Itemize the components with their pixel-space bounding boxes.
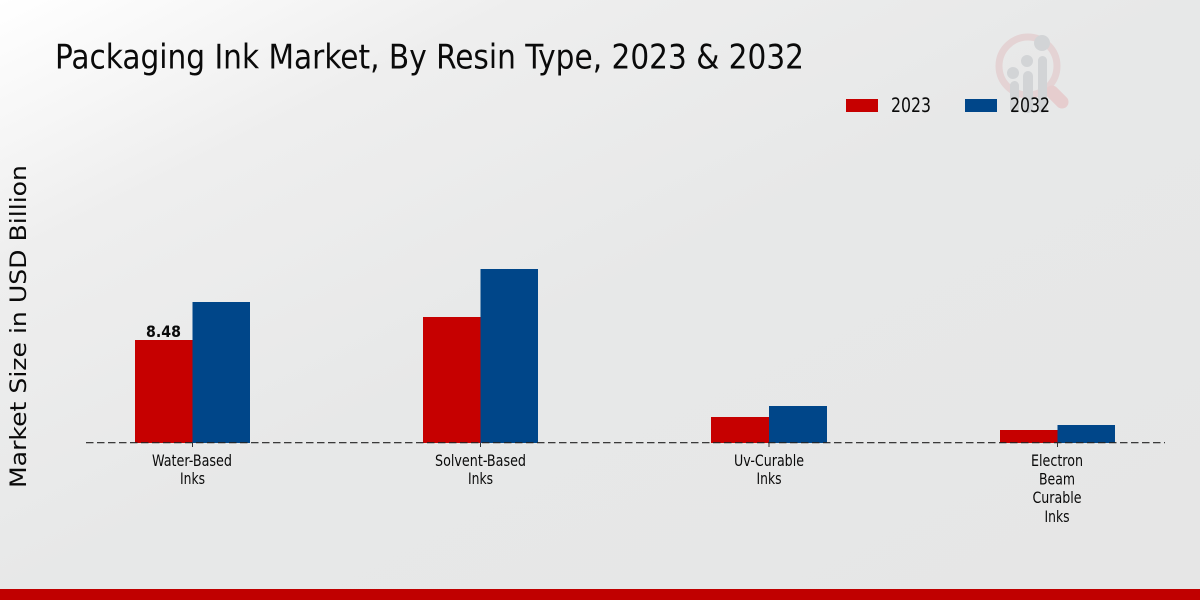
label: Electron Beam Curable Inks (1031, 451, 1083, 526)
bar chart (86, 269, 1165, 447)
group: Water-Based Inks (135, 302, 250, 443)
label: Water-Based Inks: Inks (180, 469, 205, 488)
watermark logo (999, 35, 1062, 113)
group: Electron Beam Curable Inks (1000, 425, 1115, 443)
footer bar (0, 589, 1200, 600)
label: Solvent-Based Inks: Inks (468, 469, 493, 488)
label: Water-Based Inks: Water-Based (152, 451, 232, 470)
legend: 2023: 2023 (891, 94, 931, 117)
group: Solvent-Based Inks (423, 269, 538, 443)
y axis label: Market Size in USD Billion (6, 165, 32, 488)
label: Electron Beam Curable Inks: Inks (1044, 507, 1070, 526)
legend: 2023 (846, 94, 931, 117)
label: Uv-Curable Inks: Inks (756, 469, 782, 488)
label: Water-Based Inks (152, 451, 232, 488)
label: Electron Beam Curable Inks: Electron (1031, 451, 1083, 470)
legend (846, 94, 1050, 117)
label: Solvent-Based Inks (435, 451, 526, 488)
label: Electron Beam Curable Inks: Beam (1039, 470, 1075, 488)
label: Uv-Curable Inks: Uv-Curable (734, 451, 804, 470)
label: Electron Beam Curable Inks: Curable (1032, 488, 1082, 507)
label: Uv-Curable Inks (734, 451, 804, 488)
group: Uv-Curable Inks (711, 406, 827, 443)
title: Packaging Ink Market, By Resin Type, 2023 & 2032 (55, 38, 804, 76)
legend: 2032: 2032 (1010, 94, 1050, 117)
label: Solvent-Based Inks: Solvent-Based (435, 451, 526, 470)
x axis labels (152, 451, 1083, 526)
value label: 8.48: 8.48 (146, 322, 181, 341)
legend: 2032 (965, 94, 1050, 117)
